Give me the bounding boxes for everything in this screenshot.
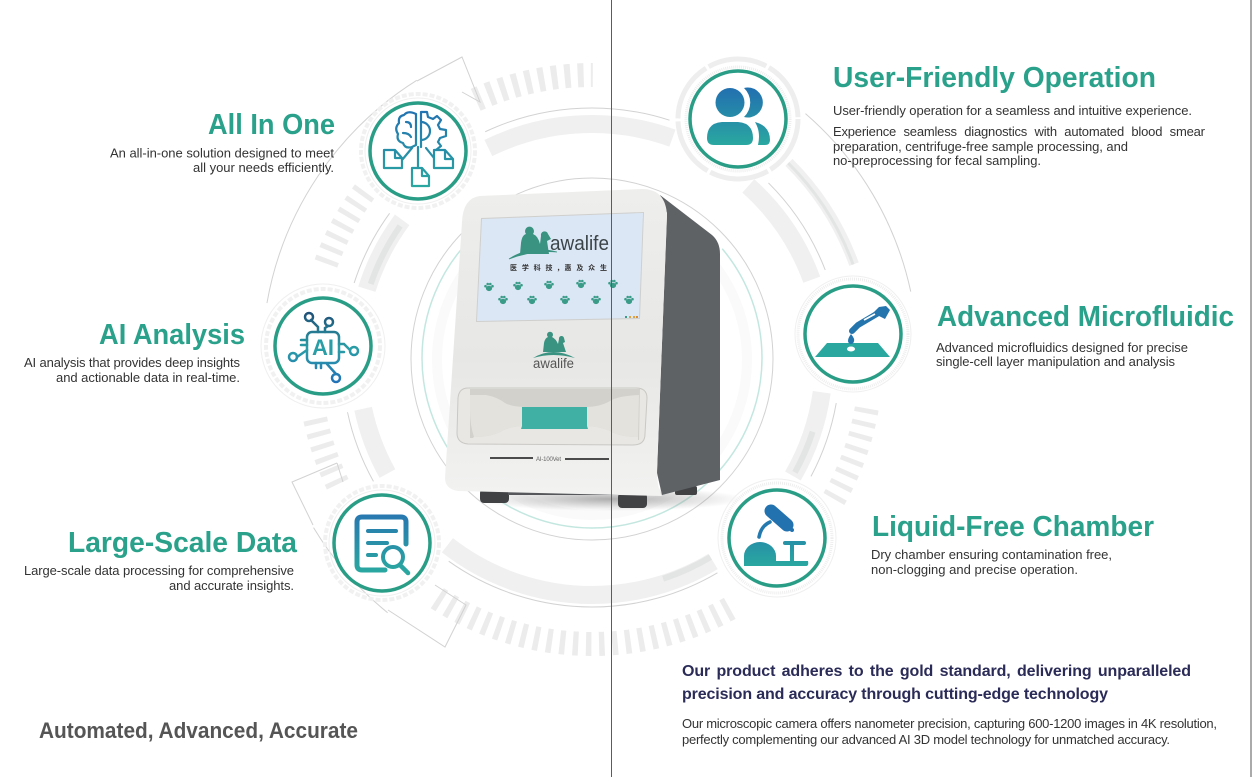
description: User-Friendly Operation: Experience seamless diagnostics with automated blood smear [833,124,1206,139]
gold standard heading: Our product adheres to the gold standard, delivering unparalleled [682,663,1191,680]
icon: brain gear documents [361,94,475,208]
front logo: awalife [533,356,574,371]
icon: AI chip [261,284,385,408]
right edge line [1250,0,1252,777]
icon: users [678,59,798,179]
description: AI Analysis: AI analysis that provides deep insights [24,355,240,370]
description: User-Friendly Operation [833,103,1206,168]
description: User-Friendly Operation: User-friendly operation for a seamless and intuitive experience. [833,103,1192,118]
feature: All In One [110,94,475,208]
description: AI Analysis: and actionable data in real-time. [56,370,240,385]
feature: User-Friendly Operation [678,59,1206,179]
description: Large-Scale Data: Large-scale data processing for comprehensive [24,563,294,578]
tagline: Automated, Advanced, Accurate [39,718,358,743]
device feet [480,486,697,508]
heading: Liquid-Free Chamber: Liquid-Free Chamber [872,511,1154,543]
screen slogan: 医学科技,惠及众生 [510,263,607,273]
gold standard description: Our microscopic camera offers nanometer precision, capturing 600-1200 images in 4K resolution, [682,716,1217,731]
description: Advanced Microfluidic [936,340,1188,369]
feature: Liquid-Free Chamber [718,479,1154,597]
description: All In One: An all-in-one solution designed to meet [110,146,334,160]
icon: microscope [718,479,836,597]
screen logo: awalife [550,233,609,255]
description: Large-Scale Data: and accurate insights. [169,578,294,593]
paw prints [484,280,634,304]
icon: document with magnifier [325,486,439,600]
device screen [476,212,644,322]
divider line [611,0,612,777]
description: All In One: all your needs efficiently. [193,160,334,175]
gold standard description [682,716,1217,747]
description: User-Friendly Operation: no-preprocessing for fecal sampling. [833,153,1041,168]
description: All In One [110,146,334,175]
description: User-Friendly Operation: preparation, centrifuge-free sample processing, and [833,139,1128,154]
model label: AI-100Vet [536,457,561,463]
sample tray opening [457,388,647,445]
heading: Advanced Microfluidic: Advanced Microfluidic [937,301,1234,333]
heading: User-Friendly Operation: User-Friendly Operation [833,62,1156,94]
description: Large-Scale Data [24,563,294,593]
device side panel [657,195,720,495]
screen logo [509,227,609,259]
feature: Large-Scale Data [24,486,439,600]
device: AI-100Vet analyzer [445,189,745,511]
description: Liquid-Free Chamber: non-clogging and precise operation. [871,562,1078,577]
heading: All In One: All In One [208,109,335,141]
gold standard heading: precision and accuracy through cutting-edge technology [682,686,1108,703]
description: Advanced Microfluidic: single-cell layer manipulation and analysis [936,354,1176,369]
description: Liquid-Free Chamber: Dry chamber ensuring contamination free, [871,547,1112,562]
model label [490,457,609,463]
teal slide window [521,407,588,429]
feature: Advanced Microfluidic [795,276,1234,392]
feature: AI Analysis [24,284,385,408]
chip label: AI [312,335,334,360]
gold standard description: perfectly complementing our advanced AI 3D model technology for unmatched accuracy. [682,732,1170,747]
heading: Large-Scale Data: Large-Scale Data [68,527,298,559]
front logo [533,332,575,371]
heading: AI Analysis: AI Analysis [99,319,245,351]
description: AI Analysis [24,355,240,385]
description: Liquid-Free Chamber [871,547,1112,577]
background rings and arcs [262,30,922,690]
description: Advanced Microfluidic: Advanced microfluidics designed for precise [936,340,1188,355]
icon: dropper over slide [795,276,911,392]
device front panel [445,189,667,496]
gold standard heading [682,663,1191,703]
